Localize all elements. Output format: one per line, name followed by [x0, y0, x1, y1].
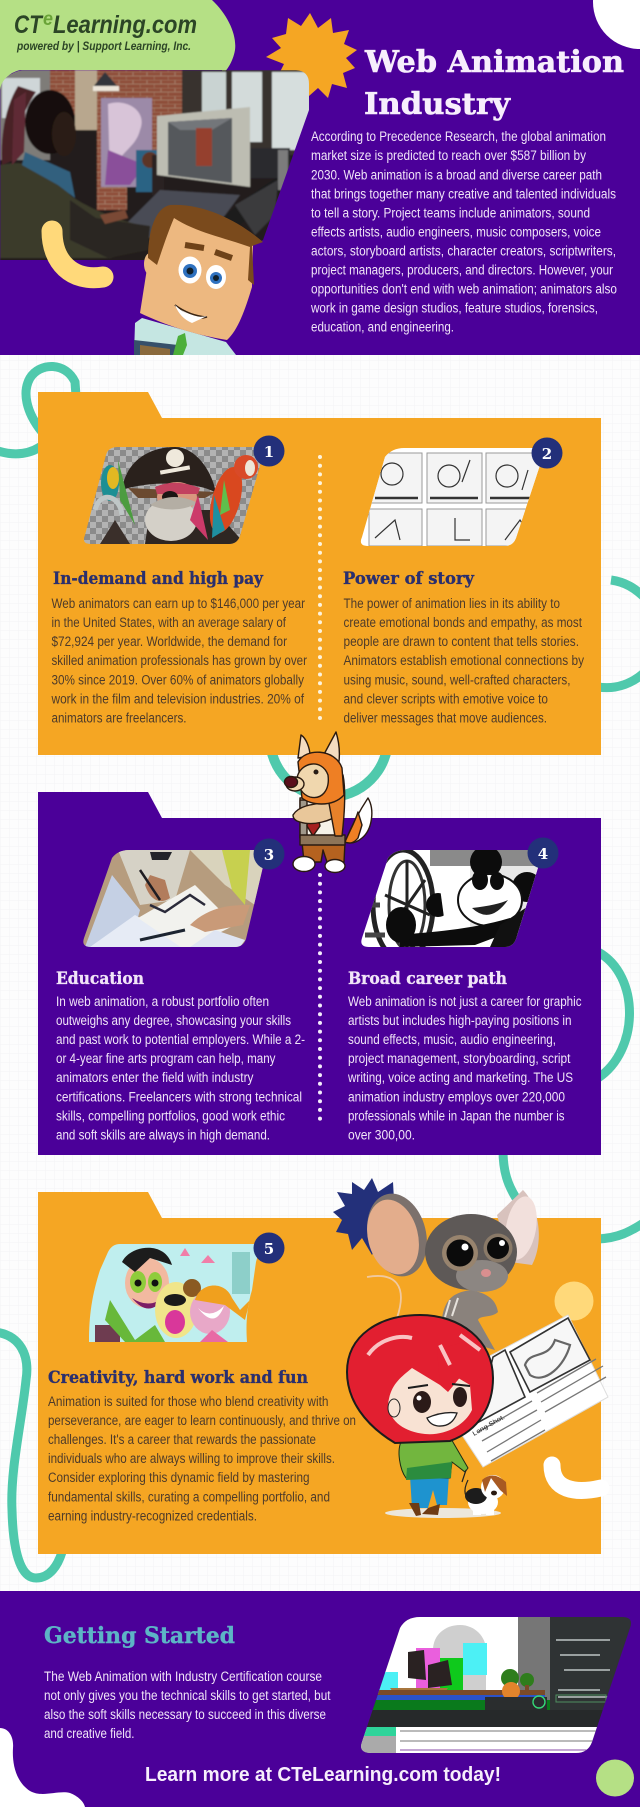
title [364, 45, 624, 122]
text block: education: skills, compelling portfolios, good work ethic [56, 1108, 285, 1124]
logo: powered by | Support Learning, Inc. [16, 41, 191, 53]
logo: Learning.com [53, 11, 197, 39]
panel: purple careers [38, 792, 601, 1155]
header band [0, 0, 640, 355]
white corner blob [0, 1728, 85, 1807]
text block: creativity: challenges. It's a career that rewards the passionate [48, 1432, 316, 1447]
number badge 1 [254, 436, 284, 466]
text block: pay: $72,924 per year. Worldwide, the demand for [52, 634, 287, 649]
text block: career path [347, 994, 582, 1142]
number badge 2: 2 [542, 445, 552, 463]
text block: getting started: The Web Animation with Industry Certification course [44, 1669, 322, 1684]
text block: creativity: perseverance, are eager to learn continuously, and thrive on [48, 1413, 356, 1428]
green circle accent [596, 1760, 634, 1796]
text block: pay: skilled animation professionals has grown by over [52, 653, 307, 668]
number badge 5: 5 [264, 1240, 274, 1258]
panel: orange creativity [38, 1192, 601, 1554]
teal decorative curves [0, 366, 640, 1578]
text block: education: and soft skills are always in high demand. [56, 1128, 270, 1142]
text block: education: animators enter the field with industry [56, 1070, 254, 1085]
heading: Education [56, 969, 144, 988]
red haired girl with dog [347, 1315, 507, 1518]
intro paragraph: work in game design studios, feature studios, forensics, [310, 300, 598, 316]
intro paragraph: to tell a story. Project teams include animators, sound [311, 206, 590, 220]
divider dots [318, 457, 322, 724]
text block: getting started: also the soft skills necessary to succeed in this diverse [44, 1707, 326, 1722]
heading: Broad career path [348, 969, 507, 988]
image: cartoon family [89, 1244, 258, 1342]
sketch notes: Long Shot. [472, 1414, 506, 1438]
text block: education: or 4-year fine arts program can help, many [56, 1051, 276, 1066]
call to action: Learn more at CTeLearning.com today! [145, 1763, 501, 1786]
number badge 4: 4 [538, 845, 548, 863]
number badge 1: 1 [264, 443, 274, 461]
text block: pay: work in the film and television industries. 20% of [51, 692, 304, 706]
white corner circle [593, 0, 640, 49]
text block: story [344, 596, 584, 726]
panel: orange careers [38, 392, 601, 755]
intro paragraph: According to Precedence Research, the global animation [311, 129, 606, 144]
image: hand drawing on paper [80, 848, 270, 950]
mouse character [359, 1187, 541, 1350]
logo: CT [14, 11, 44, 39]
logo [14, 9, 197, 53]
text block: pay: in the United States, with an average salary of [52, 615, 286, 630]
text block: creativity: fundamental skills, curating a compelling portfolio, and [48, 1490, 330, 1504]
number badge 4 [528, 838, 558, 868]
logo: e [43, 9, 53, 30]
green logo blob [0, 0, 235, 90]
text block: education: In web animation, a robust portfolio often [56, 994, 269, 1009]
number badge 2 [532, 438, 562, 468]
intro paragraph: 2030. Web animation is a broad and diverse career path [311, 168, 602, 182]
text block: story: people are drawn to content that tells stories. [344, 634, 579, 649]
footer band [0, 1591, 640, 1807]
intro paragraph: education, and engineering. [311, 320, 454, 334]
text block: education: outweighs any degree, showcasing your skills [56, 1013, 291, 1028]
text block: getting started: not only gives you the technical skills to get started, but [44, 1688, 331, 1703]
text block: story: using music, sound, well-crafted characters, [344, 672, 570, 688]
orange starburst [266, 13, 357, 98]
cartoon man character [134, 205, 263, 355]
text block: career path: over 300,00. [348, 1128, 415, 1142]
text block: creativity: earning industry-recognized credentials. [48, 1508, 257, 1524]
text block: getting started: and creative field. [44, 1726, 134, 1741]
text block: education: and past work to potential employers. While a 2- [56, 1032, 305, 1047]
divider dots [318, 875, 322, 1124]
text block: story: The power of animation lies in its ability to [344, 596, 560, 611]
intro paragraph: market size is predicted to reach over $587 billion by [311, 148, 586, 163]
beagle [462, 1470, 507, 1515]
text block: creativity [48, 1394, 356, 1524]
text block: career path: professionals while in Japan the number is [348, 1108, 565, 1124]
intro paragraph [310, 129, 617, 334]
heading: Creativity, hard work and fun [48, 1368, 308, 1387]
image: pirate [84, 447, 260, 544]
text block: story: Animators establish emotional connections by [344, 653, 584, 668]
text block: story: and clever scripts with emotive voice to [344, 692, 548, 706]
text block: creativity: individuals who are always willing to improve their skills. [48, 1451, 335, 1466]
text block: career path: artists but includes high-paying positions in [348, 1013, 572, 1028]
text block: pay: 30% since 2019. Over 60% of animators globally [52, 672, 304, 688]
navy starburst [333, 1178, 410, 1255]
text block: creativity: Animation is suited for those who blend creativity with [48, 1394, 328, 1409]
text block: career path: Web animation is not just a career for graphic [348, 994, 582, 1009]
text block: career path: project management, storyboarding, script [348, 1051, 571, 1066]
text block: story: create emotional bonds and empathy, as most [344, 615, 582, 630]
intro paragraph: effects artists, audio engineers, music composers, voice [311, 224, 601, 240]
image: black and white cartoon mouse at ship wheel [361, 850, 538, 947]
number badge 3 [254, 838, 284, 870]
text block: story: deliver messages that move audiences. [344, 710, 547, 726]
heading: Power of story [343, 569, 474, 588]
number badge 3: 3 [264, 846, 274, 864]
yellow circle accent [554, 1282, 594, 1320]
app screenshot [355, 1615, 640, 1755]
heading: In-demand and high pay [53, 569, 263, 588]
text block: pay: Web animators can earn up to $146,000 per year [52, 596, 305, 611]
text block: career path: sound effects, music, audio engineering, [348, 1032, 556, 1047]
photo: animator at workstation [0, 70, 312, 262]
text block: pay [51, 596, 307, 726]
text block: pay: animators are freelancers. [52, 710, 186, 726]
text block: career path: animation industry employs over 220,000 [348, 1090, 565, 1104]
text block: getting started [44, 1669, 331, 1741]
white curved accent [552, 1465, 601, 1490]
text block: education: certifications. Freelancers with strong technical [56, 1090, 302, 1104]
text block: education [56, 994, 305, 1142]
yellow curved accent [52, 231, 103, 278]
heading: Getting Started [44, 1623, 235, 1649]
text block: career path: writing, voice acting and marketing. The US [347, 1070, 573, 1085]
title: Industry [364, 87, 512, 122]
number badge 5 [254, 1232, 284, 1264]
fox mascot [284, 732, 372, 872]
storyboard sheet [462, 1315, 608, 1467]
text block: creativity: Consider exploring this dynamic field by mastering [48, 1470, 310, 1485]
image: storyboard [360, 448, 540, 546]
title: Web Animation [364, 45, 624, 80]
